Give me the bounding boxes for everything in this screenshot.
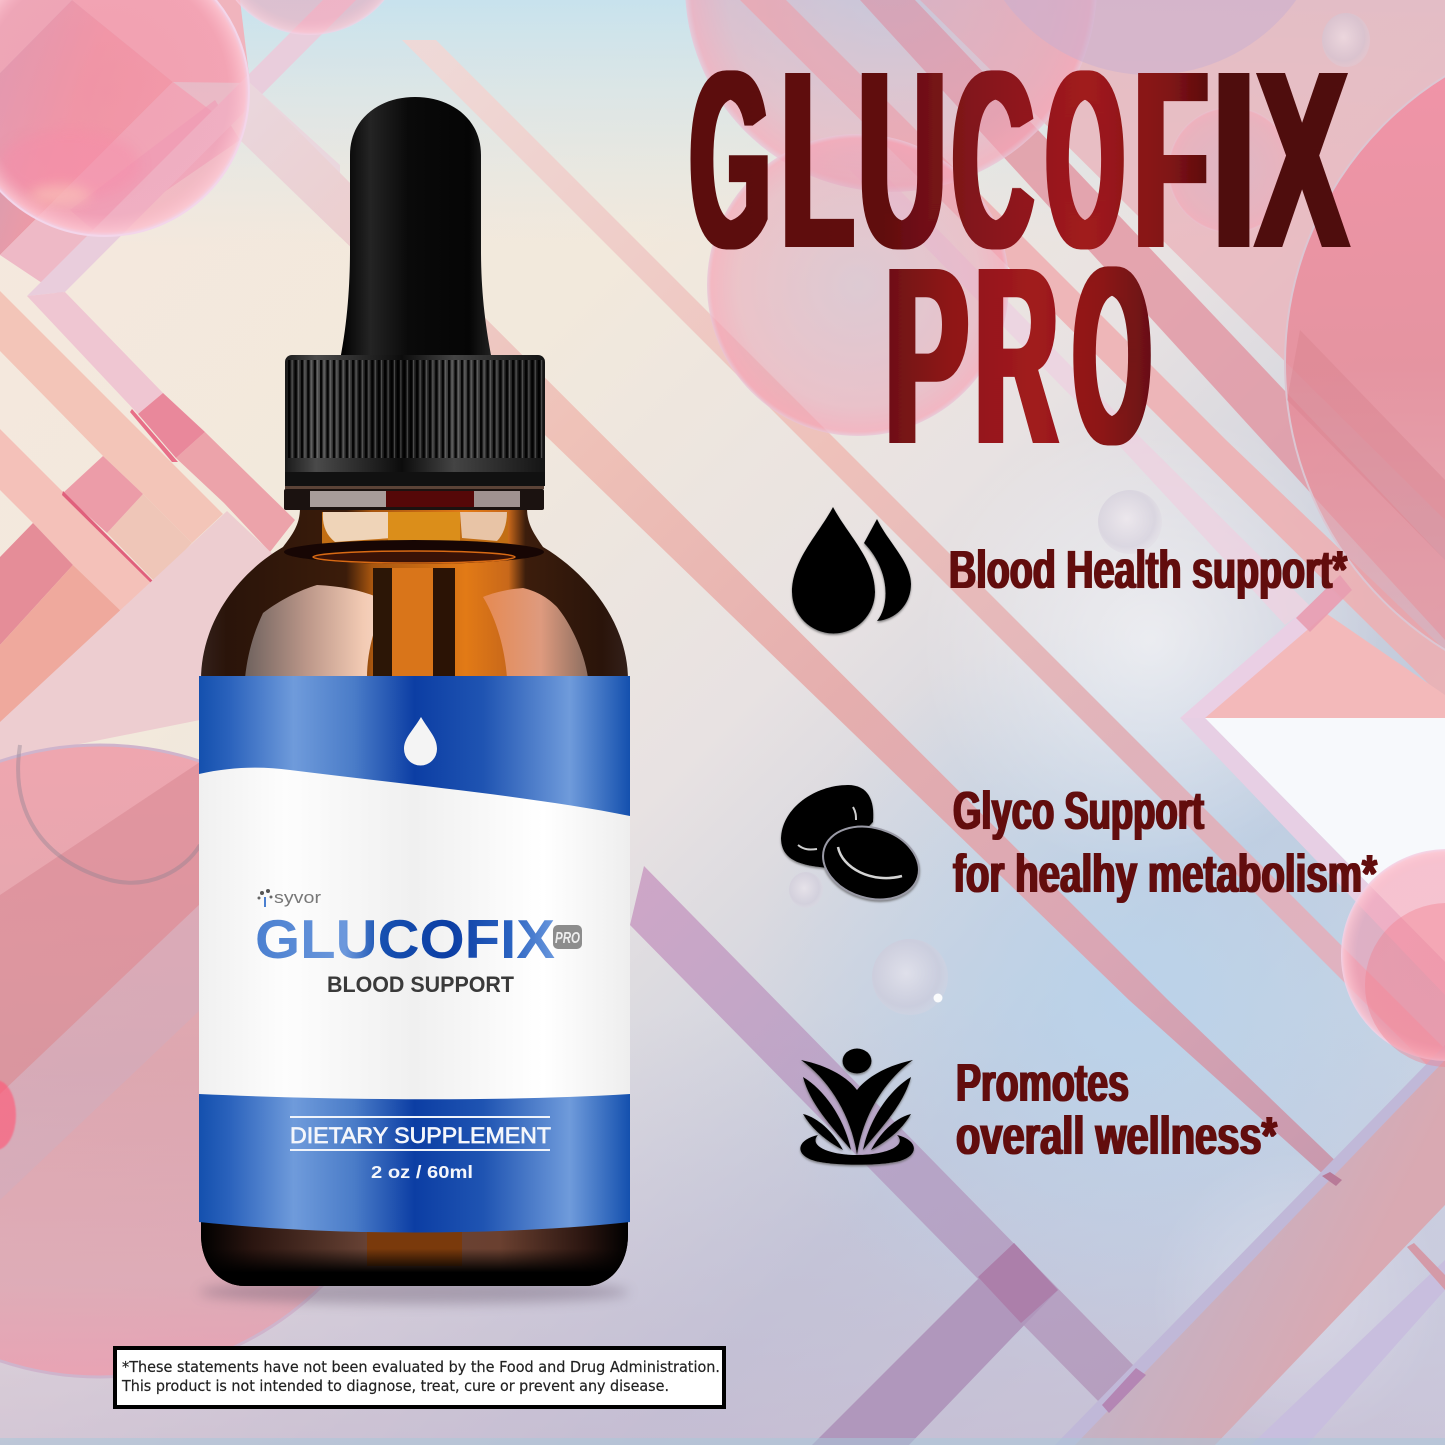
blue label top: [199, 676, 630, 1232]
title line 1: C: [952, 18, 1034, 301]
text: [956, 1053, 1277, 1166]
title line 1: L: [781, 18, 854, 301]
text: Glyco Support: [953, 781, 1204, 841]
bubble: lower right: [1341, 849, 1445, 1067]
bubble: right large: [1285, 26, 1445, 700]
disclaimer: *These statements have not been evaluated by the Food and Drug Administration.: [122, 1358, 720, 1376]
disclaimer: [115, 1348, 724, 1407]
volume: 2 oz / 60ml: [371, 1162, 473, 1182]
text: overall wellness*: [956, 1106, 1277, 1166]
top-right ribbons: [740, 0, 1445, 995]
top-left ribbons: [0, 0, 356, 760]
text: Promotes: [956, 1053, 1129, 1113]
dropper cap: [284, 355, 545, 510]
title line 1: I: [1212, 18, 1256, 301]
label: [199, 676, 630, 1232]
glass highlights: [245, 585, 385, 678]
title line 2: [885, 214, 1151, 497]
bubble: top left: [0, 0, 249, 236]
pro badge: [553, 925, 582, 949]
subtitle: BLOOD SUPPORT: [327, 972, 515, 997]
title line 1: F: [1134, 18, 1208, 301]
product bottle: [199, 97, 630, 1304]
title line 2: P: [885, 214, 968, 497]
dropper bulb: [340, 97, 492, 360]
pro badge: PRO: [555, 930, 580, 947]
glass body: [201, 508, 628, 1286]
brand syvor: [258, 888, 321, 907]
small clear droplets: [789, 13, 1370, 1015]
title: O: [1073, 214, 1151, 497]
glass neck: [284, 512, 544, 564]
title line 2: R: [975, 214, 1058, 497]
icon: blood cells: [781, 785, 928, 911]
logo glucofix: GLUCOFIX: [255, 908, 555, 970]
text: [953, 781, 1377, 904]
dietary supplement: DIETARY SUPPLEMENT: [290, 1123, 551, 1148]
dropper tube: [373, 568, 455, 678]
label drop icon: [404, 717, 437, 766]
bottle base: [201, 1218, 628, 1286]
brand syvor: syvor: [274, 888, 321, 907]
bubble: bottom left: [0, 745, 416, 1377]
title line 1: O: [1046, 18, 1124, 301]
title line 1: X: [1256, 18, 1348, 301]
benefit: wellness: [800, 1048, 1277, 1166]
title line 1: G: [690, 18, 770, 301]
title line 1: U: [858, 18, 946, 301]
benefit: blood health: [792, 507, 1347, 633]
icon: wellness figure: [800, 1048, 914, 1165]
disclaimer: This product is not intended to diagnose, treat, cure or prevent any disease.: [121, 1377, 669, 1395]
title line 1: [690, 18, 1348, 301]
title: [690, 18, 1348, 497]
long ribbons: [240, 83, 1345, 1186]
bottom-right ribbons: [0, 1045, 1445, 1445]
benefit: glyco support: [781, 781, 1377, 911]
icon: blood drops: [792, 507, 911, 633]
white label: [199, 768, 630, 1099]
